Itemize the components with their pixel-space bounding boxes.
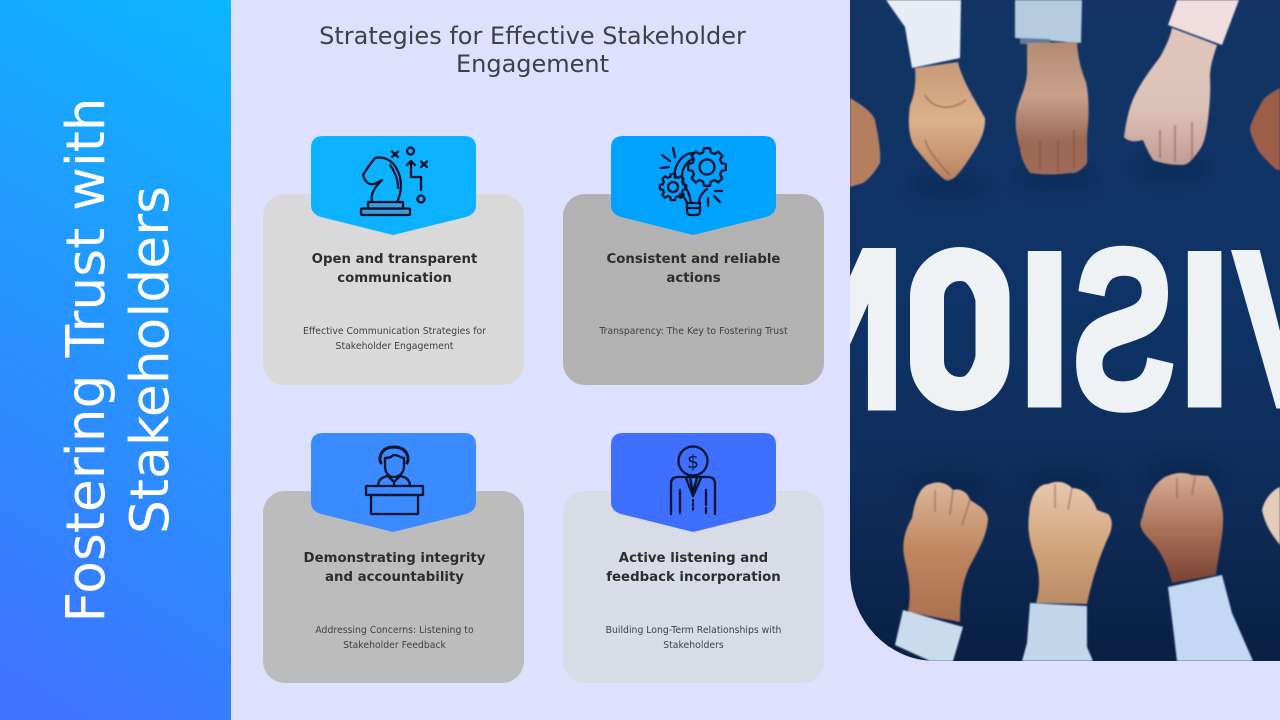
main heading: Strategies for Effective Stakeholder	[319, 22, 746, 50]
card heading: Open and transparent	[312, 252, 477, 267]
card heading: Consistent and reliable	[607, 252, 780, 267]
main heading: Engagement	[456, 50, 609, 78]
tab with lightbulb gears icon	[611, 136, 776, 235]
VISION letters: O	[910, 208, 1001, 449]
icon tabs overlay	[311, 136, 776, 532]
main heading	[319, 22, 746, 78]
card heading: and accountability	[325, 570, 464, 585]
card text: Stakeholder Engagement	[336, 341, 453, 352]
card heading	[607, 252, 780, 286]
card text: Stakeholder Feedback	[343, 640, 446, 651]
VISION letters: S	[1072, 202, 1175, 455]
icon: speaker at podium	[366, 447, 423, 514]
table shadows	[924, 160, 1204, 488]
card heading: feedback incorporation	[606, 570, 781, 585]
tab with speaker at podium icon	[311, 433, 476, 532]
table background	[850, 0, 1280, 661]
hands top row	[850, 0, 1280, 187]
card text: Addressing Concerns: Listening to	[315, 625, 474, 636]
icon: lightbulb and gears	[660, 148, 726, 215]
card text	[303, 326, 486, 352]
letter O body	[927, 264, 992, 394]
sidebar title: Stakeholders	[118, 186, 181, 534]
card text: Building Long-Term Relationships with	[606, 625, 781, 636]
icon: business person with dollar head	[671, 446, 715, 514]
card heading: actions	[666, 271, 721, 286]
icon: chess knight strategy	[361, 148, 427, 215]
photo: fists on table with VISION letters	[850, 0, 1280, 661]
sidebar title	[54, 97, 181, 623]
card text: Transparency: The Key to Fostering Trust	[599, 326, 788, 337]
sidebar panel	[0, 0, 231, 720]
card heading: Demonstrating integrity	[304, 551, 485, 566]
finger lines bottom row	[935, 476, 1195, 525]
card: open communication	[263, 194, 524, 385]
hands bottom row	[895, 473, 1280, 661]
VISION letters: I	[1173, 202, 1236, 455]
card heading	[312, 252, 478, 286]
card text	[315, 625, 474, 651]
sidebar title: Fostering Trust with	[54, 97, 117, 623]
card heading: communication	[337, 271, 452, 286]
card heading: Active listening and	[619, 551, 768, 566]
card: reliable actions	[563, 194, 824, 385]
card text: Stakeholders	[663, 640, 724, 651]
card heading	[304, 551, 486, 585]
icon: business person with dollar head: $	[687, 451, 699, 473]
VISION letters	[850, 246, 1280, 413]
tab with business person icon	[611, 433, 776, 532]
card: listening	[563, 491, 824, 683]
card: integrity	[263, 491, 524, 683]
tab with chess knight icon	[311, 136, 476, 235]
VISION letters: I	[1013, 202, 1076, 455]
knuckle lines top row	[925, 95, 1192, 175]
card heading	[606, 551, 781, 585]
card text	[606, 625, 781, 651]
card text: Effective Communication Strategies for	[303, 326, 486, 337]
